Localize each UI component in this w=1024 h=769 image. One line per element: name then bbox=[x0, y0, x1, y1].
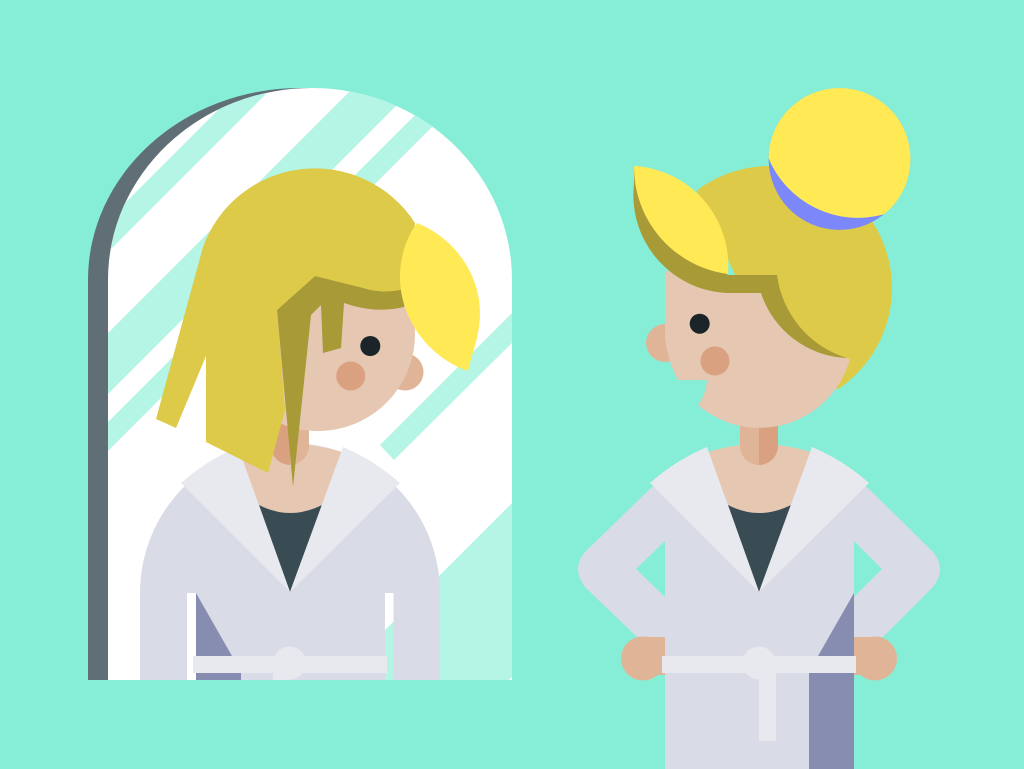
hands bbox=[621, 636, 897, 680]
reflected face bbox=[277, 276, 415, 431]
robe shadow bbox=[809, 593, 854, 769]
reflected hair bun bbox=[400, 223, 480, 371]
reflected fringe shadow bbox=[277, 276, 410, 487]
hair bun bbox=[768, 88, 910, 230]
hair back bbox=[697, 166, 892, 389]
panel: mirror bbox=[88, 88, 530, 680]
mirror corner bbox=[509, 677, 512, 680]
reflected chest bbox=[239, 444, 342, 513]
arms bbox=[578, 487, 940, 637]
fringe shadow bbox=[633, 166, 847, 358]
figure: woman in a bathrobe bbox=[578, 50, 950, 769]
reflected hair bbox=[156, 168, 415, 473]
face bbox=[665, 270, 850, 428]
reflected robe bbox=[140, 443, 440, 680]
eye bbox=[690, 314, 710, 334]
robe body bbox=[665, 498, 854, 769]
mirror glass bbox=[108, 88, 512, 680]
mirror reflection stripes bbox=[100, 88, 530, 680]
shirt bbox=[728, 505, 791, 592]
cheek bbox=[700, 346, 730, 376]
hair lock bbox=[634, 166, 728, 274]
ear bbox=[646, 324, 684, 362]
reflected eye bbox=[360, 336, 380, 356]
reflected neck bbox=[273, 424, 309, 465]
collar bbox=[650, 447, 869, 592]
reflected ear bbox=[398, 355, 424, 390]
mirror frame bbox=[88, 88, 312, 680]
neck bbox=[740, 420, 778, 465]
belt bbox=[662, 646, 856, 741]
reflected figure bbox=[140, 168, 480, 680]
reflected cheek bbox=[336, 362, 365, 390]
chest bbox=[708, 444, 811, 513]
illustration: woman looking in a mirror bbox=[88, 88, 940, 769]
reflected collar bbox=[181, 447, 400, 592]
reflected shirt bbox=[259, 505, 322, 592]
reflected belt bbox=[193, 646, 387, 680]
